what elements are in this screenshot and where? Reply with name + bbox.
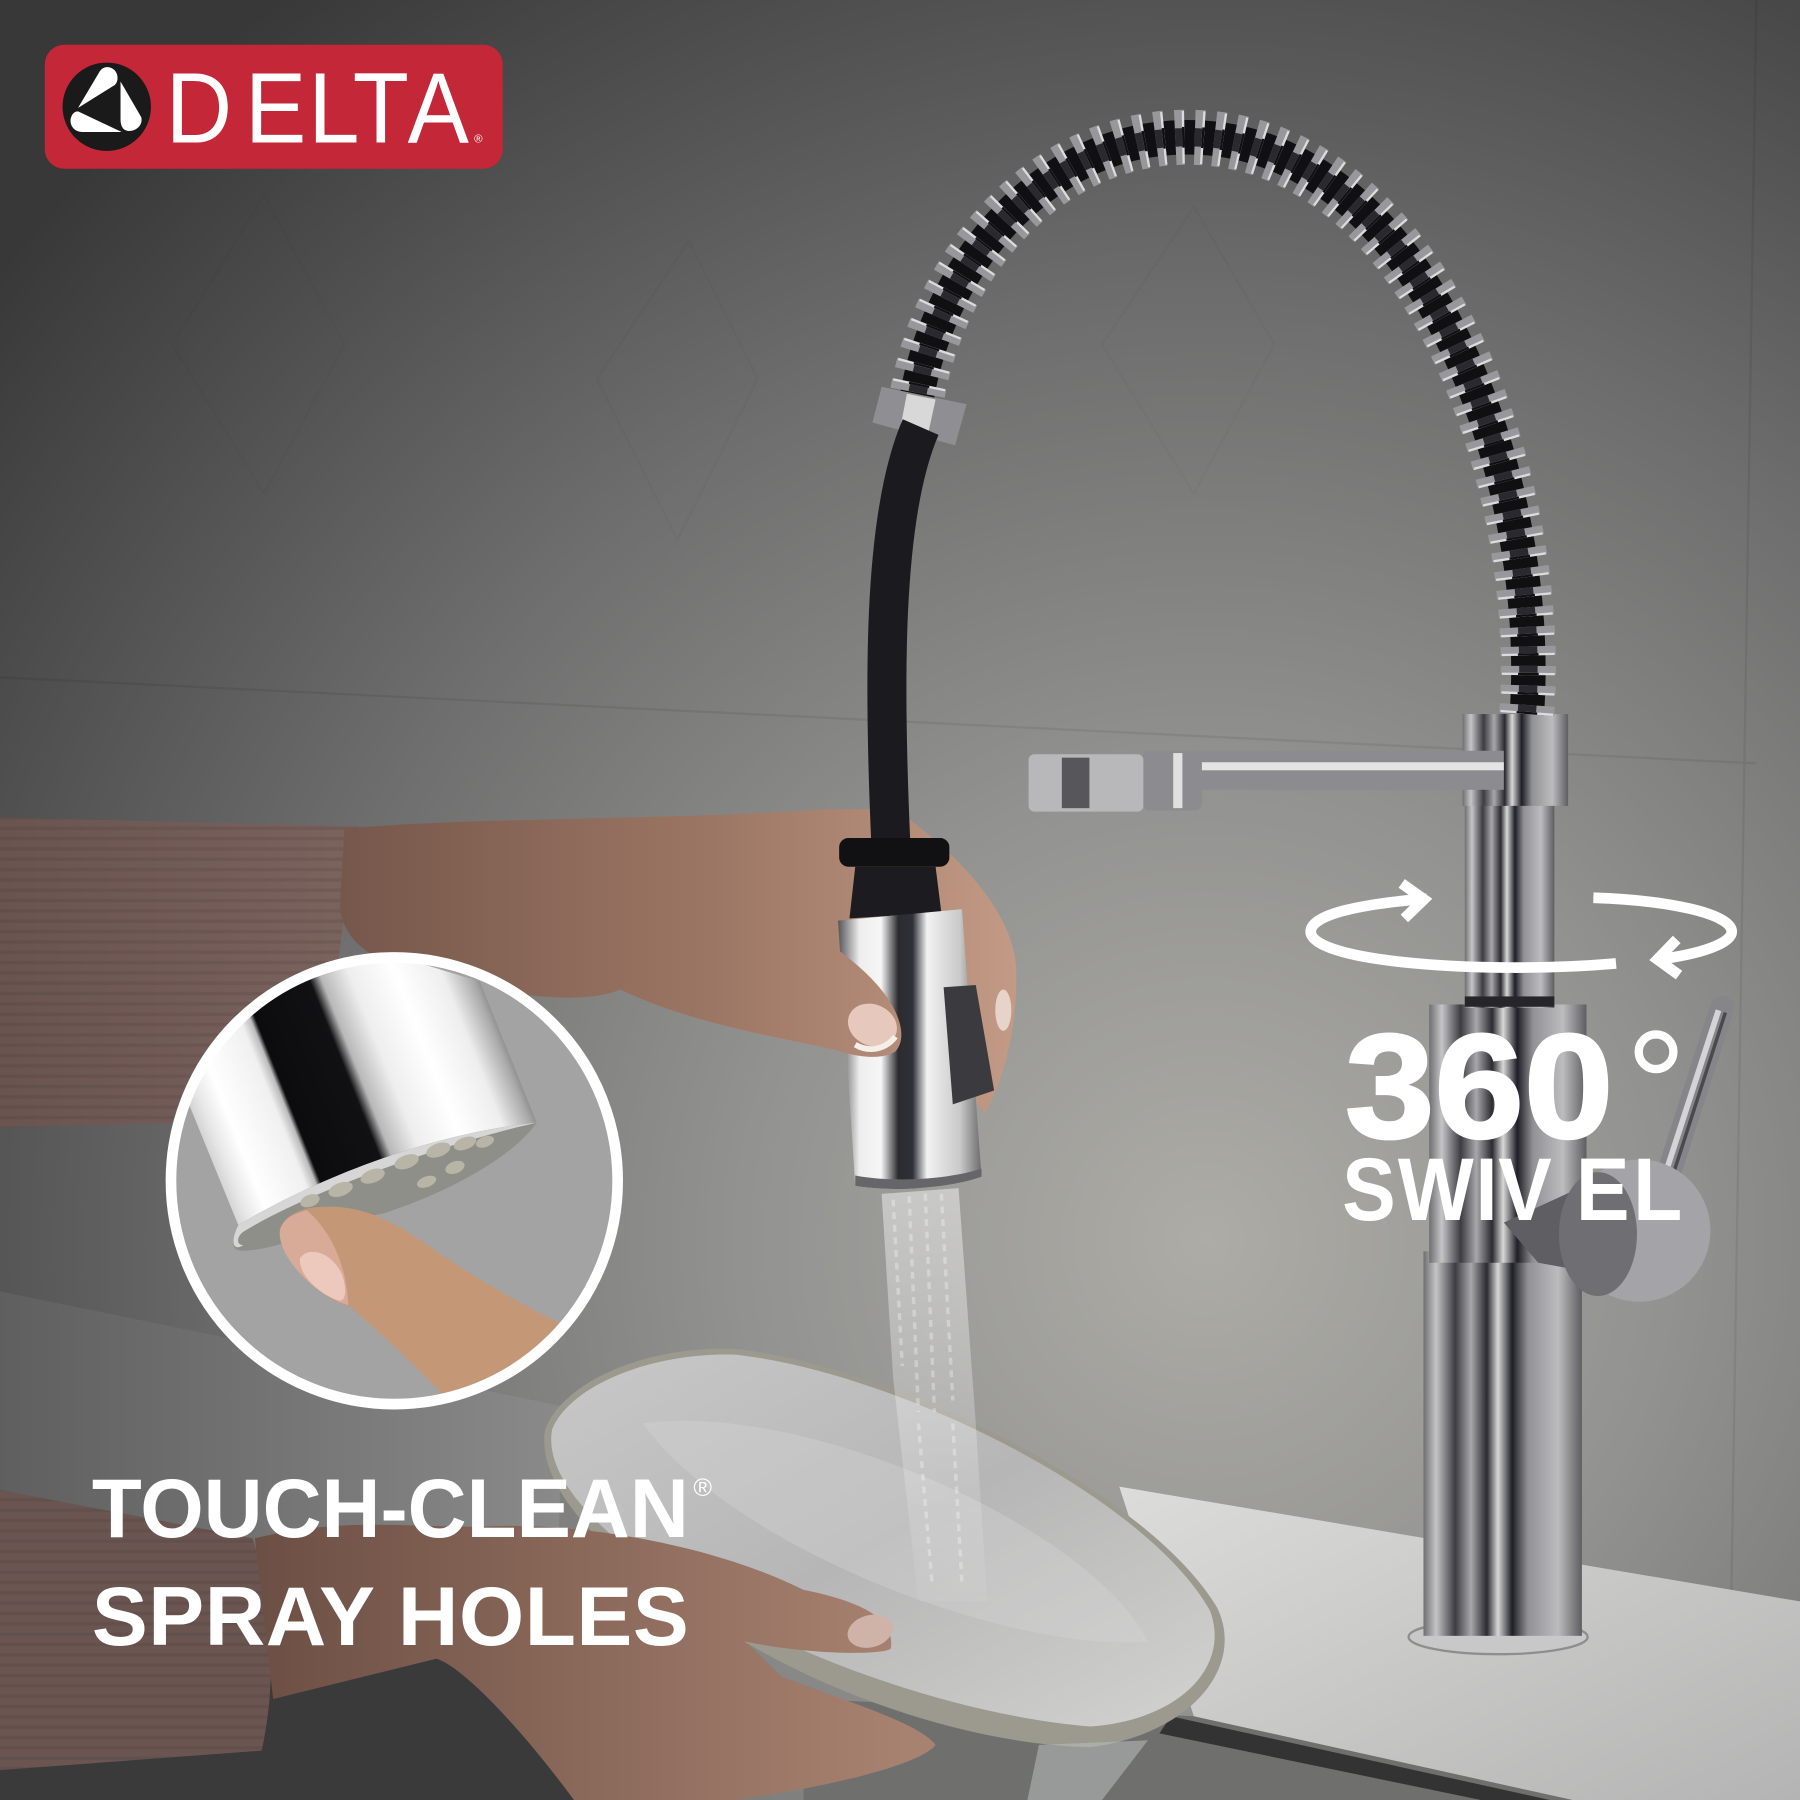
lower sleeve [0,1490,271,1770]
spring collar [872,387,967,445]
inset circle: touch-clean spray holes [171,930,618,1404]
upper arm and hand [340,809,1016,1114]
degree ring [1639,1034,1673,1069]
lower arm and fingers [255,1525,936,1800]
thumb over spray head [620,872,904,1057]
black hose [887,427,921,844]
faucet base column [1409,714,1588,1654]
caption line two: SPRAY HOLES [92,1569,689,1663]
plate [544,1349,1225,1747]
water running off plate [1027,1740,1148,1800]
left counter [0,1291,562,1800]
chrome spray face cylinder [190,962,536,1225]
upper sleeve [0,817,358,1127]
right counter [804,1487,1800,1800]
logo badge [45,45,503,169]
finger [280,1207,560,1395]
lower dark cabinet [0,1653,712,1800]
coil spring [916,137,1528,714]
touch-clean caption [92,1461,712,1663]
faucet handle [1504,1008,1725,1302]
thumb on plate [482,1526,896,1653]
black sprayer collar [839,838,949,918]
swivel word: SWIVEL [1342,1140,1682,1240]
swivel callout [1311,883,1732,1240]
water stream [882,1188,987,1601]
registered symbol: ® [693,1474,712,1502]
swivel arrows [1311,883,1732,975]
spray holder arm [1029,751,1504,812]
logo wordmark: DELTA [166,53,469,164]
spray head [838,909,994,1189]
spray face with holes [233,1123,537,1251]
registered mark: ® [474,133,483,145]
fingertip at spray head [995,990,1011,1031]
logo emblem [63,63,151,151]
360 number: 360 [1345,1004,1613,1169]
caption line one: TOUCH-CLEAN [92,1461,689,1555]
